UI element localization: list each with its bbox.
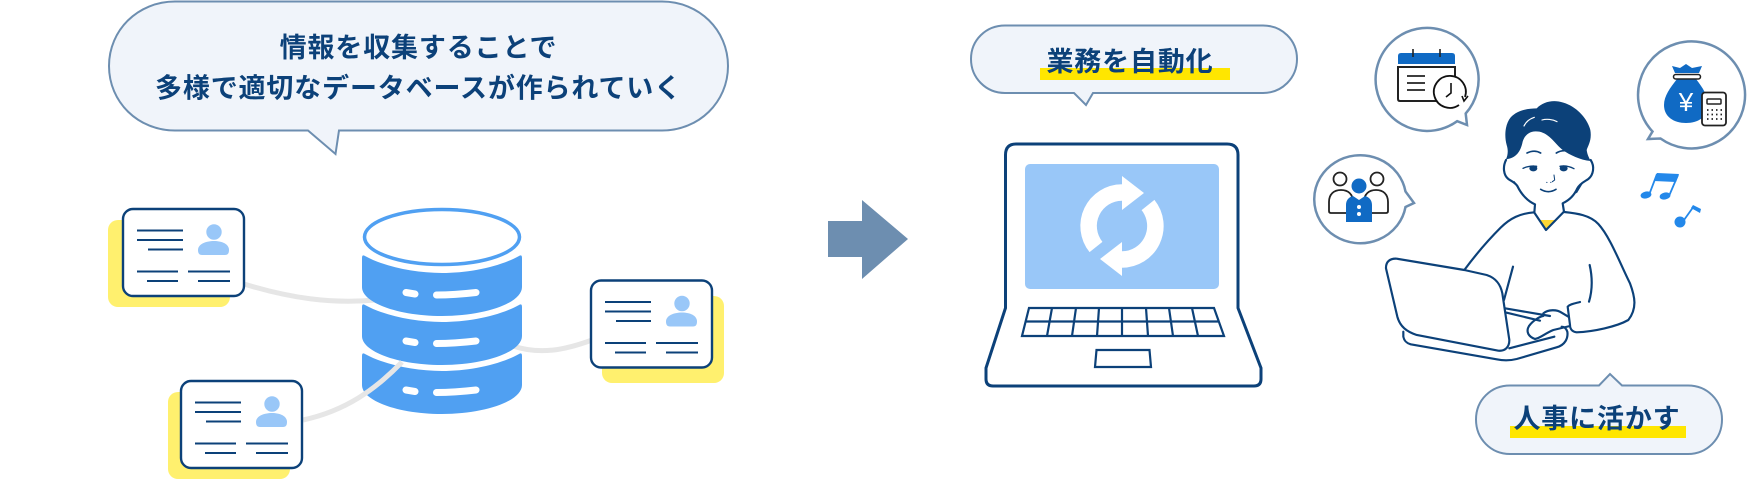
connector lines to database: [244, 284, 592, 351]
card: right profile: [591, 280, 724, 383]
icon: money bag: ¥: [1678, 87, 1694, 117]
icon: sync arrows: [1089, 176, 1155, 276]
heading: information collection: [155, 33, 682, 104]
laptop keyboard: [1022, 308, 1224, 336]
connector line crossing database: [303, 362, 402, 420]
panel: automation speech bubble: [971, 26, 1297, 105]
person: neck and shirt: [1464, 212, 1634, 332]
icon: laptop with sync: [986, 144, 1261, 386]
heading: information collection: 情報を収集することで: [280, 33, 557, 63]
card: top left profile: [108, 209, 244, 307]
person: hair: [1505, 101, 1591, 161]
heading: automation: 業務を自動化: [1046, 47, 1214, 77]
highlight bar: [1510, 426, 1686, 438]
card: bottom left profile: [168, 381, 302, 479]
arrow: [828, 200, 908, 279]
laptop screen: [1025, 164, 1219, 289]
panel: information speech bubble: [109, 2, 728, 154]
person: face: [1504, 151, 1593, 213]
laptop trackpad: [1095, 350, 1151, 367]
heading: use in HR: 人事に活かす: [1513, 404, 1681, 434]
laptop on desk: [1386, 259, 1568, 360]
heading: information collection: 多様で適切なデータベースが作られていく: [155, 72, 682, 104]
icon: database: [362, 210, 522, 414]
bubble: calendar and clock icon: [1376, 28, 1479, 131]
person: hand: [1528, 310, 1570, 339]
icon: calculator: [1702, 92, 1726, 126]
highlight bar: [1040, 68, 1230, 80]
bubble: people icon: [1314, 155, 1414, 243]
illustration: person using a laptop: [1386, 101, 1634, 360]
icon: music notes: [1640, 173, 1701, 228]
bubble: money bag and calculator icon: [1638, 41, 1745, 148]
panel: human resources speech bubble: [1476, 374, 1722, 454]
